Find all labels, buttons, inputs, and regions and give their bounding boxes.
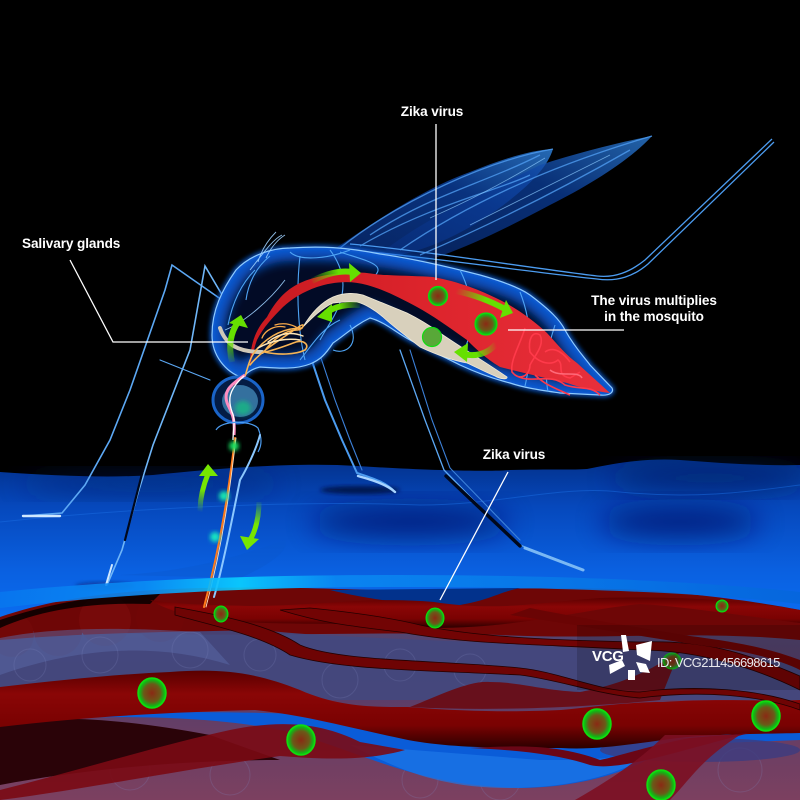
label: Zika virus bottom: Zika virus bbox=[483, 447, 545, 462]
mosquito body outline bbox=[212, 232, 612, 395]
mosquito body translucent shell bbox=[212, 248, 612, 395]
salivary duct left bbox=[220, 328, 262, 352]
label: The virus multiplies in the mosquito: in the mosquito bbox=[604, 309, 704, 324]
watermark: ID: VCG211456698615 bbox=[657, 655, 780, 670]
arrow: up proboscis bbox=[199, 464, 218, 512]
watermark: VCG bbox=[592, 648, 624, 665]
arrow: midgut downward bbox=[456, 291, 513, 318]
malpighian tubules bbox=[512, 328, 600, 395]
tissue layers below skin bbox=[0, 629, 800, 800]
midgut red bbox=[250, 272, 610, 393]
skin surface bbox=[0, 459, 800, 617]
salivary glands bbox=[242, 324, 307, 385]
virus in crop bbox=[422, 328, 442, 346]
arrow: along gut to abdomen bbox=[312, 263, 361, 282]
crop sac beige bbox=[303, 293, 507, 379]
leader lines bbox=[70, 124, 624, 600]
blood vessels bbox=[0, 598, 800, 800]
virus in midgut top bbox=[428, 286, 448, 306]
watermark bbox=[577, 625, 800, 690]
label: The virus multiplies in the mosquito: The virus multiplies bbox=[591, 293, 717, 308]
arrow: down into skin bbox=[240, 502, 259, 550]
arrow: from proboscis up to gland bbox=[229, 315, 248, 362]
label: Zika virus top: Zika virus bbox=[401, 104, 463, 119]
hind leg raised bbox=[350, 139, 774, 280]
arrow: midgut to crop bbox=[454, 343, 496, 362]
proboscis bbox=[204, 435, 260, 607]
label: Salivary glands: Salivary glands bbox=[22, 236, 120, 251]
red blood cells under skin bbox=[0, 585, 800, 800]
arrow: crop forward bbox=[317, 304, 360, 322]
legs bbox=[23, 265, 584, 585]
wings bbox=[330, 136, 652, 262]
skin band cyan in front of legs bbox=[0, 575, 800, 608]
head with eye bbox=[213, 375, 263, 452]
virus in midgut middle bbox=[475, 313, 497, 335]
virus particles in the blood bbox=[138, 600, 780, 800]
